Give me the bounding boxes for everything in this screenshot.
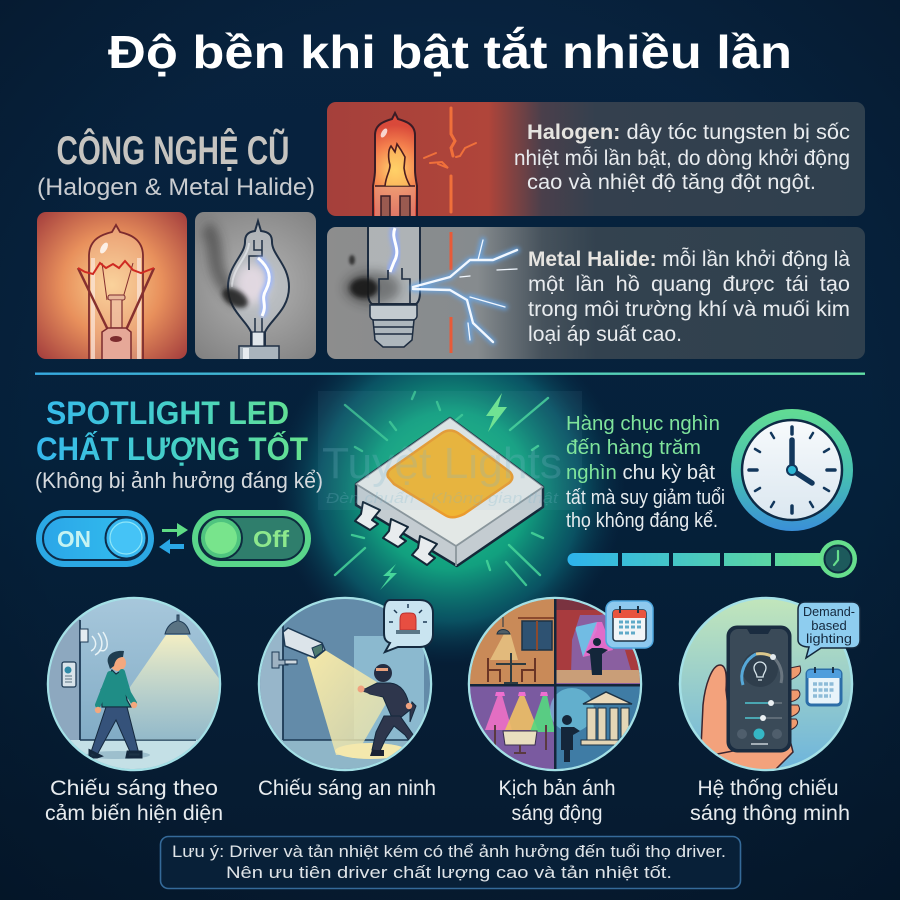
label: presence sensor: Chiếu sáng theo [50, 777, 218, 800]
text: halogen: cao và nhiệt độ tăng đột ngột. [527, 171, 816, 194]
heading: spotlight LED: SPOTLIGHT LED [46, 395, 289, 431]
toggle: on [36, 510, 154, 567]
text: metal halide [528, 248, 850, 346]
heading: spotlight LED: CHẤT LƯỢNG TỐT [36, 431, 308, 467]
icon: smartphone [727, 626, 791, 752]
heading: old technology: (Halogen & Metal Halide) [37, 174, 315, 201]
progress bar [568, 540, 857, 578]
toggle: off: Off [253, 526, 289, 552]
scene: security lighting [255, 595, 435, 775]
watermark: Đèn chuẩn - Không gian thật [326, 490, 559, 507]
text: cycle claim: thọ không đáng kể. [566, 510, 718, 532]
icon: crack line [424, 108, 476, 212]
scene: smart lighting [680, 598, 860, 775]
text: cycle claim: tất mà suy giảm tuổi [566, 487, 725, 509]
heading: old technology: CÔNG NGHỆ CŨ [56, 127, 290, 173]
icon: clock [731, 409, 853, 531]
scene: dynamic lighting [465, 595, 653, 775]
text: halogen [514, 121, 850, 194]
callout: demand-based lighting: Demand- [803, 604, 855, 619]
icon: LED chip [335, 392, 548, 590]
label: smart lighting [690, 777, 850, 825]
panel: metal halide [327, 225, 865, 359]
note box: Lưu ý: Driver và tản nhiệt kém có thể ảnh hưởng đến tuổi thọ driver. [172, 842, 726, 861]
label: presence sensor [45, 777, 223, 825]
text: cycle claim: Hàng chục nghìn [566, 413, 720, 435]
image: incandescent halogen bulb [37, 212, 187, 360]
heading: spotlight LED: (Không bị ảnh hưởng đáng kể) [35, 468, 323, 493]
note box [160, 836, 740, 888]
toggle: off [192, 510, 311, 567]
text: metal halide: trong môi trường khí và muối kim [528, 298, 850, 321]
text: cycle claim [566, 413, 725, 532]
scene: presence sensor lighting [45, 595, 225, 775]
icon: calendar [606, 601, 653, 648]
watermark: Tuyệt Lights [322, 439, 562, 488]
heading: old technology [37, 127, 315, 201]
heading: spotlight LED [35, 395, 323, 493]
label: presence sensor: cảm biến hiện diện [45, 802, 223, 825]
label: dynamic lighting: sáng động [512, 802, 602, 825]
text: metal halide: Metal Halide: mỗi lần khởi động là [528, 248, 850, 271]
label: dynamic lighting [498, 777, 616, 825]
icon: halogen capsule [373, 113, 417, 218]
toggle: on: ON [57, 526, 91, 552]
label: smart lighting: Hệ thống chiếu [698, 777, 838, 800]
label: dynamic lighting: Kịch bản ánh [498, 777, 616, 800]
icon: alarm bubble [384, 600, 433, 652]
label: security: Chiếu sáng an ninh [258, 777, 436, 800]
panel: halogen [327, 102, 865, 218]
text: cycle claim: đến hàng trăm [566, 437, 701, 459]
text: metal halide: loại áp suất cao. [528, 323, 682, 346]
text: cycle claim: nghìn chu kỳ bật [566, 462, 715, 484]
icon: schedule calendar [807, 667, 841, 705]
text: metal halide: một lần hồ quang được tái tạo [528, 273, 850, 296]
callout: demand-based lighting: lighting [806, 631, 852, 646]
text: halogen: nhiệt mỗi lần bật, do dòng khởi động [514, 147, 850, 170]
icon: bar clock [819, 540, 857, 578]
callout: demand-based lighting: based [811, 618, 847, 633]
callout: demand-based lighting [798, 602, 860, 658]
title: Độ bền khi bật tắt nhiều lần [108, 26, 792, 78]
note box: Nên ưu tiên driver chất lượng cao và tản nhiệt tốt. [226, 863, 672, 882]
icon: arc line [450, 232, 452, 353]
watermark [318, 391, 582, 510]
arrows: on off [159, 523, 188, 554]
text: halogen: Halogen: dây tóc tungsten bị sốc [527, 121, 850, 144]
label: smart lighting: sáng thông minh [690, 802, 850, 825]
image: metal halide bulb with soot [195, 212, 316, 360]
icon: lightning [413, 240, 517, 342]
icon: metal halide tube [344, 225, 420, 347]
